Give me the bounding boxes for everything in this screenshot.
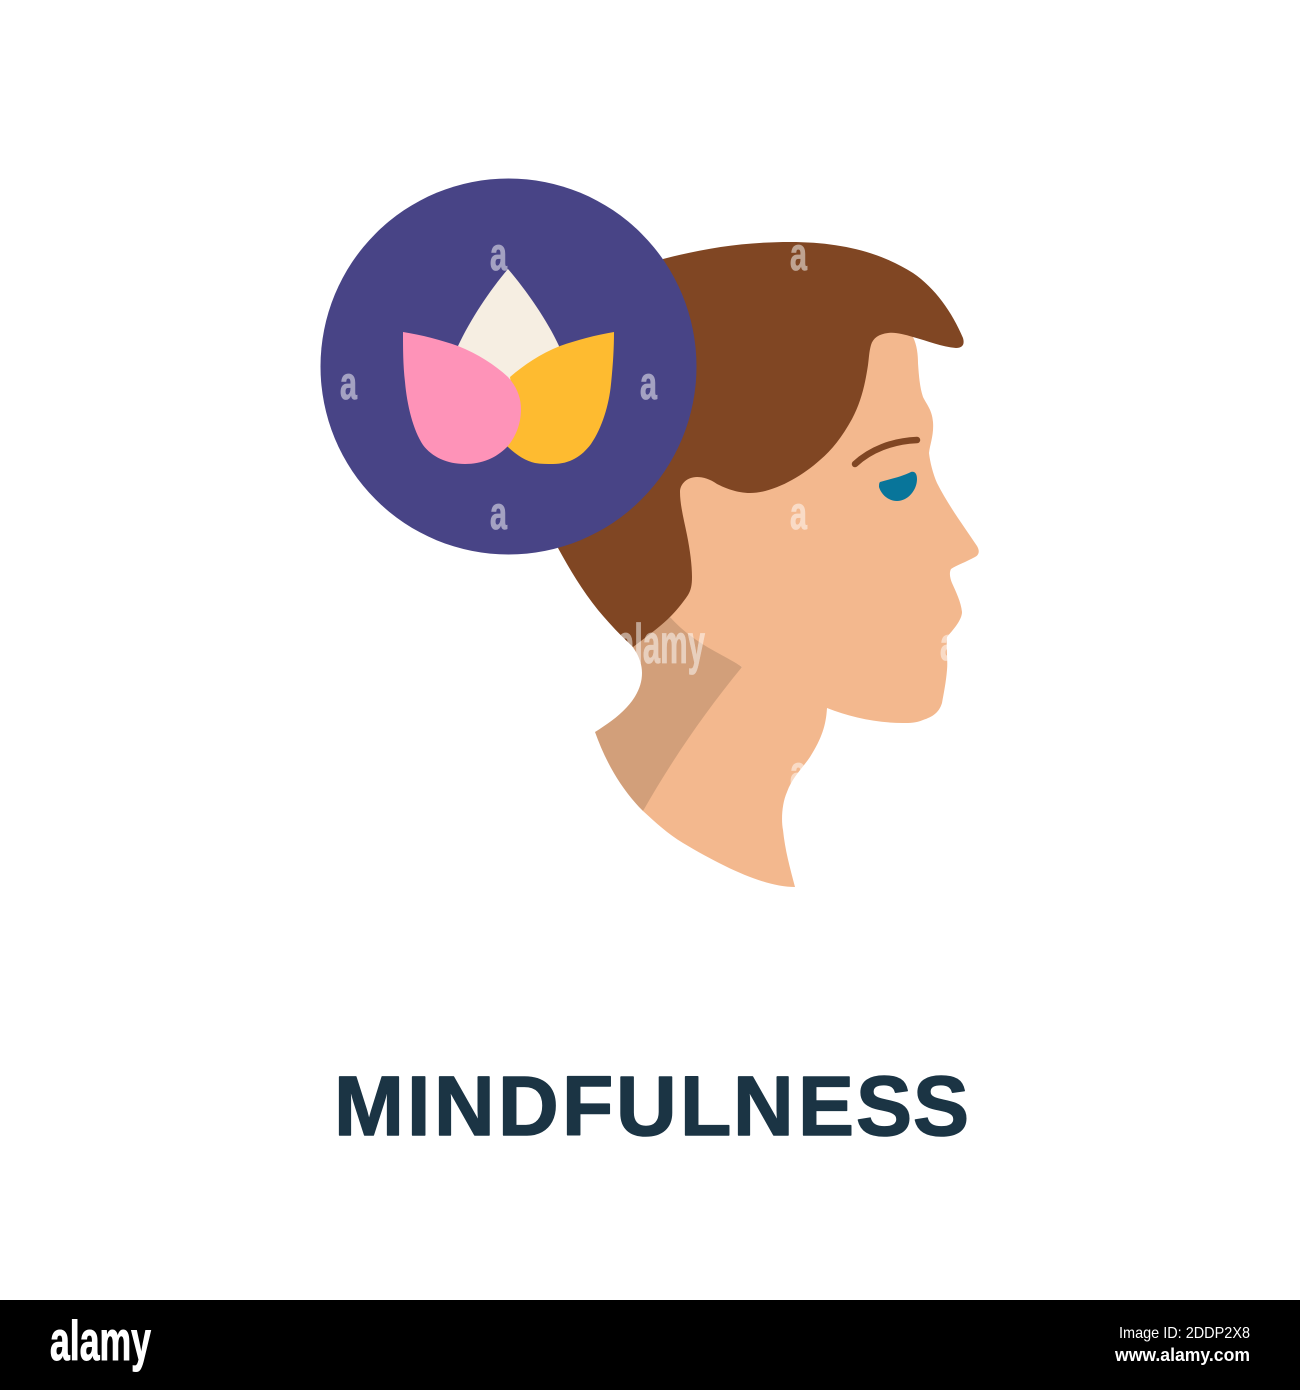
- watermark: alamy marks: a: [640, 357, 657, 409]
- footer bar: [0, 1300, 1300, 1390]
- watermark: alamy marks: a: [790, 228, 807, 280]
- watermark: alamy marks: a: [490, 228, 507, 280]
- icon: lotus flower: [403, 269, 614, 464]
- illustration: head in profile with lotus badge: [320, 178, 979, 887]
- title: MINDFULNESS: [334, 1059, 969, 1153]
- cream centre petal: [458, 269, 559, 446]
- watermark: alamy marks: a: [790, 746, 807, 798]
- purple circle badge: [320, 178, 696, 554]
- eyebrow: [855, 440, 917, 464]
- watermark: alamy marks: a: [340, 357, 357, 409]
- pink left petal: [403, 332, 521, 464]
- face and neck skin: [643, 320, 979, 887]
- closed eye: [879, 472, 917, 501]
- yellow right petal: [507, 332, 614, 464]
- watermark: alamy marks: a: [790, 487, 807, 539]
- watermark: alamy marks: a: [490, 487, 507, 539]
- watermark: alamy marks: a: [940, 618, 957, 670]
- watermark: alamy marks: [340, 228, 957, 798]
- website url: www.alamy.com: [1114, 1345, 1250, 1365]
- hair: [558, 242, 964, 647]
- footer logo: alamy: [50, 1309, 151, 1372]
- watermark: alamy marks: alamy: [617, 612, 705, 675]
- image id: Image ID: 2DDP2X8: [1119, 1325, 1250, 1342]
- shaded back of neck: [595, 617, 742, 811]
